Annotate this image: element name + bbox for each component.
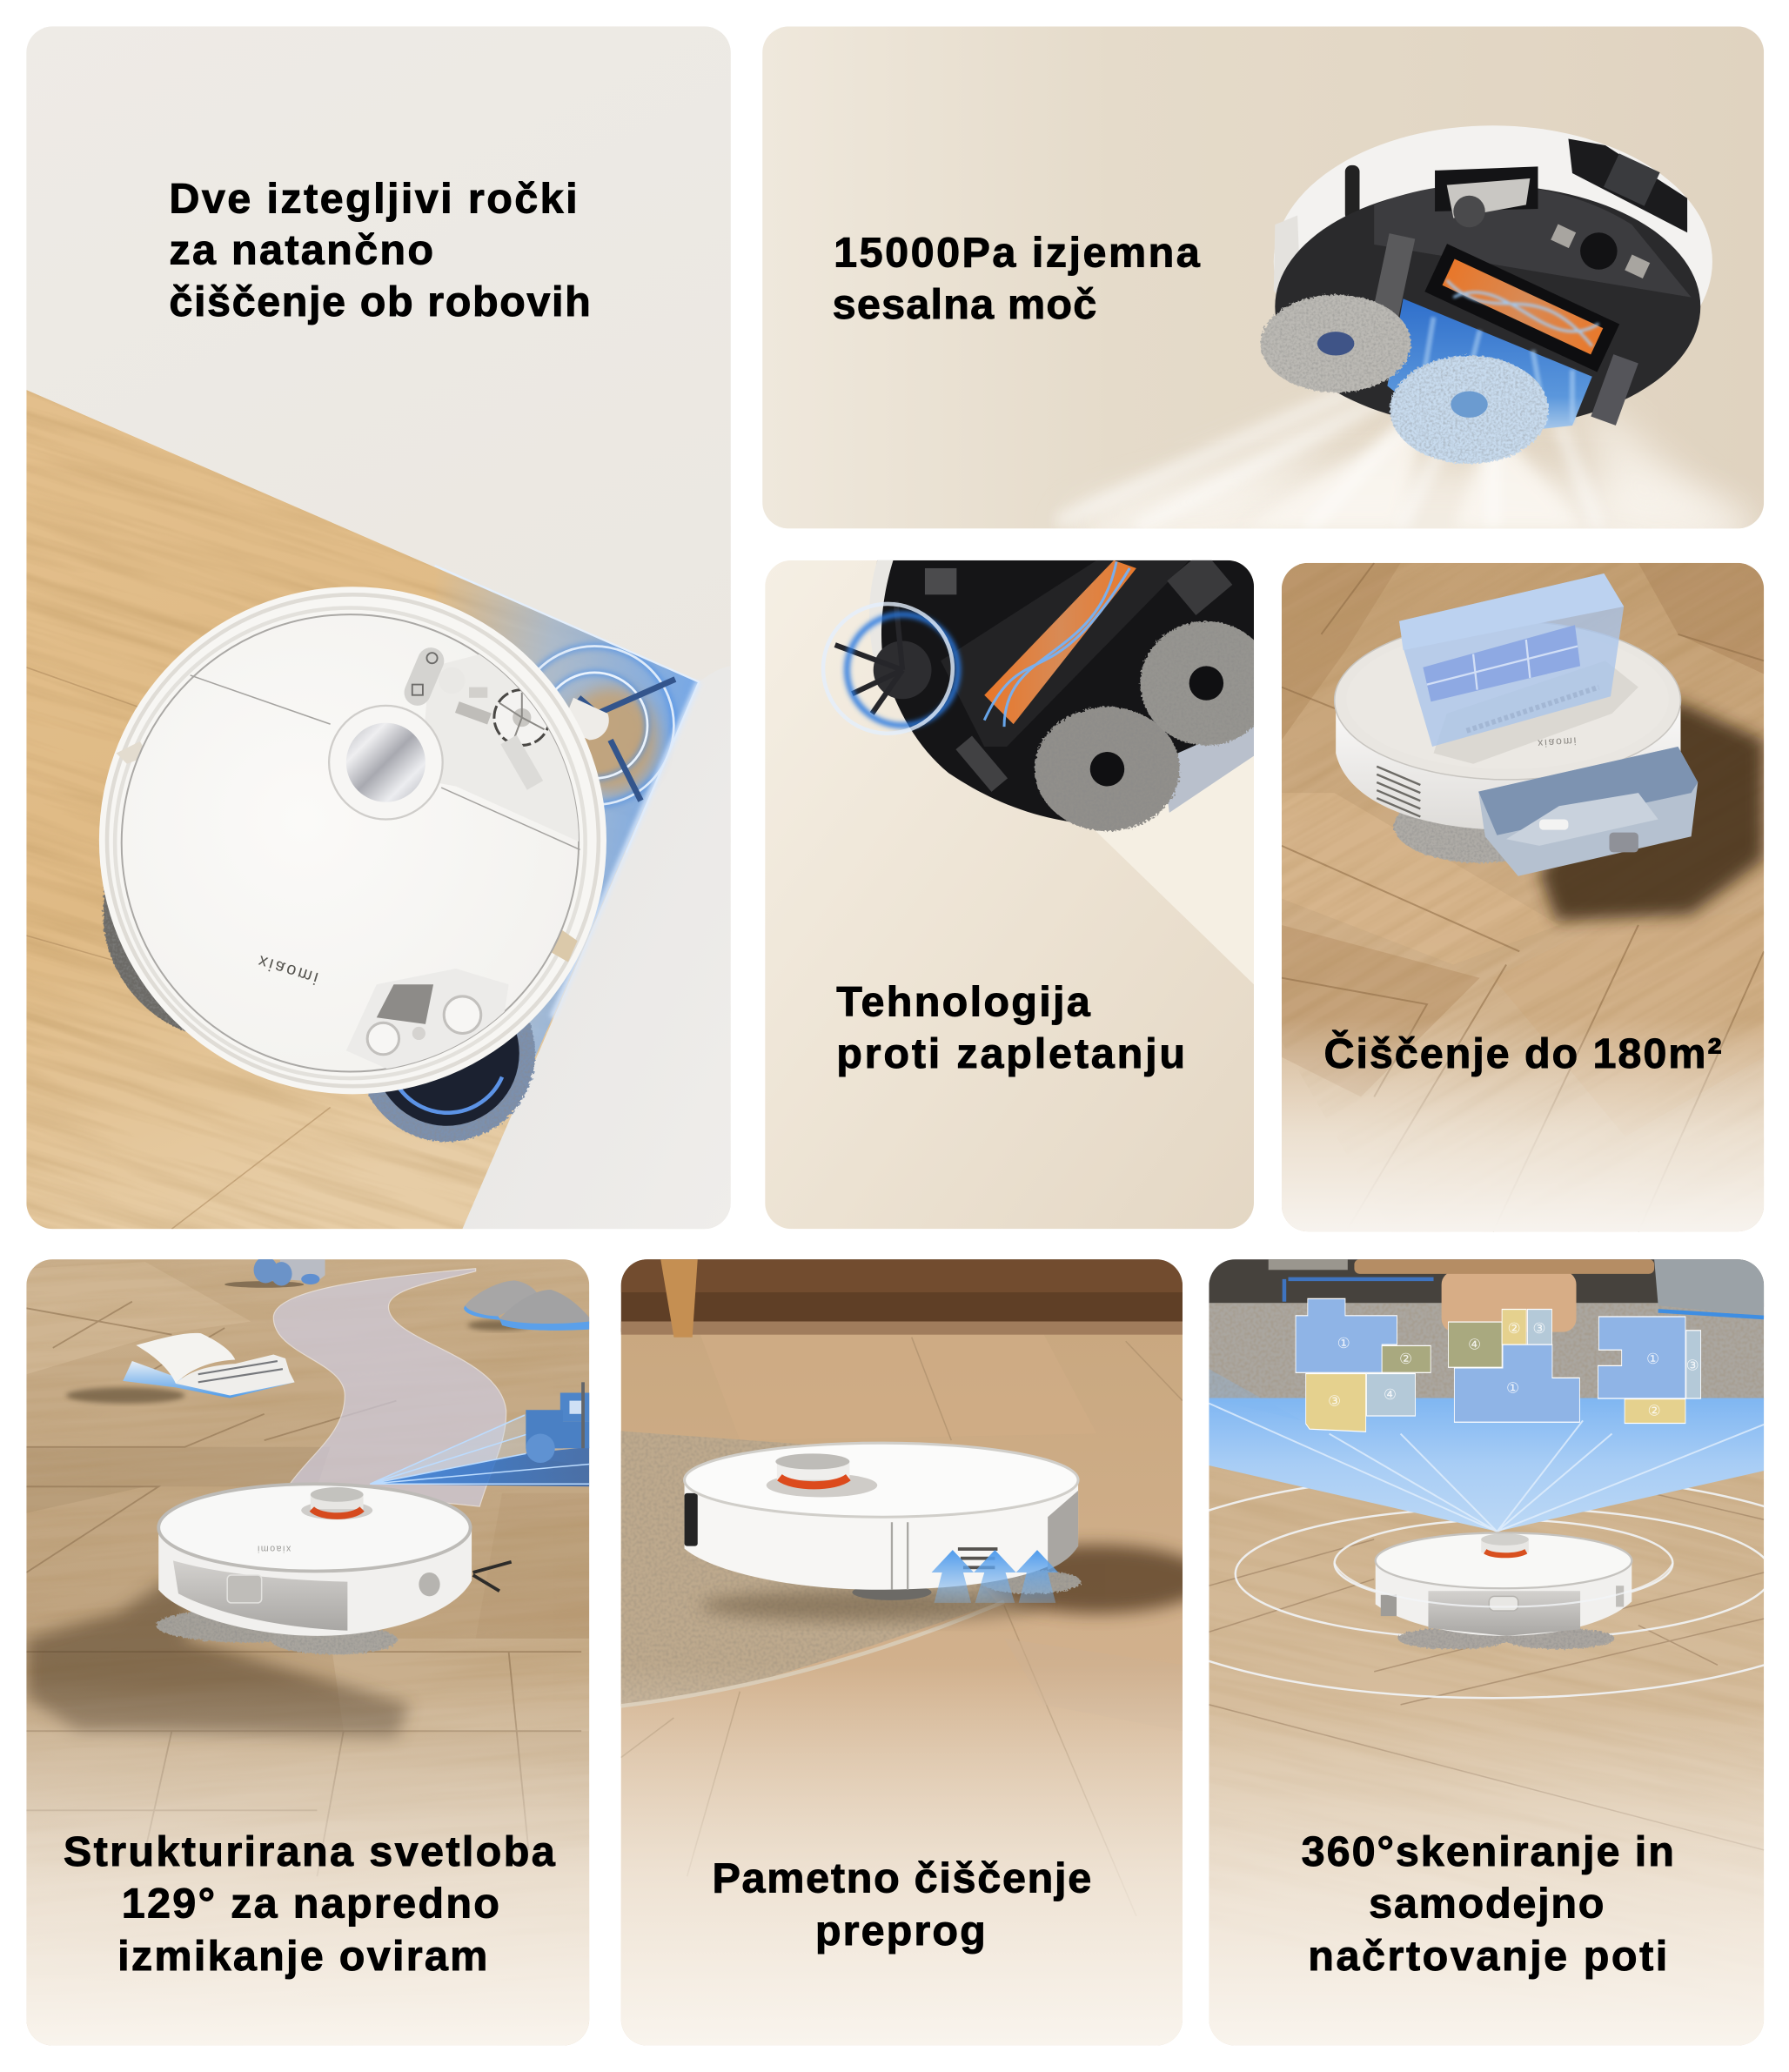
brush bay <box>1424 244 1619 372</box>
heading: samodejno <box>1369 1880 1604 1927</box>
translucent tank <box>173 1560 347 1631</box>
robot <box>1376 1532 1632 1649</box>
left track <box>955 735 1008 792</box>
sofa legs <box>1269 1259 1434 1302</box>
back wall band <box>621 1259 1183 1335</box>
heading: načrtovanje poti <box>1308 1933 1667 1980</box>
tank <box>1428 1591 1580 1636</box>
mop: lit blue <box>368 1023 536 1143</box>
wheel <box>852 1585 932 1600</box>
right wall <box>462 666 731 1229</box>
body side <box>1336 701 1680 830</box>
white shell <box>1274 125 1712 398</box>
vent <box>1377 767 1420 816</box>
map labels: ④ <box>1384 1385 1397 1403</box>
heading <box>712 1854 1091 1955</box>
panel: 360 scanning <box>998 1259 1789 2066</box>
top cover <box>1335 621 1680 780</box>
mop right <box>1390 355 1549 464</box>
mops <box>1398 1628 1509 1649</box>
heading <box>836 979 1185 1077</box>
light beam <box>370 1414 589 1486</box>
map labels: ③ <box>1328 1392 1341 1410</box>
floor <box>621 1328 1183 2046</box>
panel: carpet cleaning <box>621 1259 1209 2046</box>
center sensor disc <box>329 706 443 819</box>
top cover <box>122 614 579 1071</box>
robot with exploded parts <box>1335 573 1698 876</box>
heading: preprog <box>815 1908 986 1955</box>
front ring arc <box>1335 1563 1672 1606</box>
furniture leg <box>660 1259 698 1338</box>
vents <box>1381 1595 1397 1616</box>
side brush <box>473 1562 512 1591</box>
blue sensing glow <box>435 566 699 1057</box>
map labels: ② <box>1399 1350 1412 1367</box>
toy truck <box>526 1382 592 1463</box>
wooden floor <box>26 52 731 1229</box>
heading: čiščenje ob robovih <box>169 278 591 325</box>
curtain <box>1654 1259 1764 1318</box>
book <box>66 1333 295 1404</box>
mop <box>981 1570 1081 1593</box>
panel: suction power <box>762 26 1764 588</box>
gray rear <box>1048 1491 1078 1570</box>
round table <box>1354 1259 1654 1332</box>
brand: xiaomi <box>1538 734 1578 749</box>
panel: 180 m2 cleaning <box>1035 272 1789 1358</box>
panel: structured light <box>0 1204 707 2072</box>
heading: Čiščenje do 180m² <box>1324 1029 1722 1077</box>
back band <box>1209 1259 1764 1307</box>
heading: izmikanje oviram <box>117 1933 487 1980</box>
bumper ring <box>99 587 606 1094</box>
control buttons <box>400 643 448 710</box>
left drive track <box>1373 233 1415 317</box>
internal mechanism lower <box>346 969 509 1073</box>
bottom fade <box>621 1665 1183 2046</box>
herringbone floor <box>0 1204 707 2072</box>
white side strip <box>869 560 893 674</box>
heading: 15000Pa izjemna <box>834 230 1201 277</box>
cleaning path <box>273 1269 506 1506</box>
sensor square <box>925 568 956 594</box>
map labels: ① <box>1646 1350 1659 1367</box>
side window <box>1568 138 1687 232</box>
mop <box>1394 789 1565 863</box>
wood floor <box>998 1341 1789 2066</box>
heading: sesalna moč <box>833 281 1096 328</box>
rug <box>621 1432 1004 1706</box>
top bay <box>1435 166 1538 211</box>
mop: left <box>101 887 186 1032</box>
wall background <box>477 1195 724 1220</box>
lidar <box>1481 1533 1529 1555</box>
map labels: ② <box>1508 1319 1521 1337</box>
map labels: ② <box>1648 1401 1661 1418</box>
map labels: ③ <box>1686 1357 1699 1374</box>
right track <box>1167 550 1232 615</box>
heading: 129° za napredno <box>122 1880 499 1927</box>
dust bin <box>1478 747 1698 876</box>
top cover <box>1376 1532 1632 1588</box>
brush housing <box>941 560 1189 747</box>
slot <box>1345 165 1359 221</box>
background <box>762 26 1764 528</box>
air flow <box>1387 298 1592 439</box>
robot underside <box>1261 125 1712 464</box>
toy car <box>224 1257 325 1288</box>
filter grid <box>1423 625 1580 701</box>
body <box>158 1530 472 1636</box>
map C <box>1598 1317 1701 1424</box>
heading: za natančno <box>169 227 433 274</box>
shadow <box>984 1545 1209 1613</box>
panel: anti-tangle <box>765 550 1272 1229</box>
mop left <box>1261 295 1411 392</box>
corner brush hub <box>874 640 932 699</box>
map labels: ① <box>1506 1378 1519 1396</box>
black underside <box>1275 185 1700 428</box>
orange brush <box>984 560 1136 724</box>
brand: xiaomi <box>256 951 323 989</box>
mop front <box>1035 707 1180 831</box>
map labels <box>1328 1319 1699 1418</box>
shadow <box>1539 701 1764 921</box>
lidar <box>301 1487 372 1519</box>
vent <box>419 1572 440 1596</box>
robot <box>156 1484 512 1654</box>
background <box>765 560 1254 1229</box>
heading: proti zapletanju <box>836 1030 1185 1077</box>
bottom fade <box>1209 1705 1764 2046</box>
heading: Strukturirana svetloba <box>64 1828 556 1875</box>
blue scanning fan <box>1209 1369 1764 1532</box>
internal mechanism upper <box>425 654 579 842</box>
caster and sensors <box>1580 232 1618 270</box>
heading: 360°skeniranje in <box>1302 1828 1674 1875</box>
carpet <box>1209 1303 1764 1401</box>
side brush <box>835 601 902 714</box>
map labels: ④ <box>1468 1335 1481 1352</box>
wood floor <box>1035 272 1789 1358</box>
door seam <box>892 1522 908 1590</box>
blue ring <box>847 614 958 726</box>
right drive track <box>1591 354 1638 426</box>
heading <box>169 175 591 325</box>
scan rings <box>1110 1473 1789 1698</box>
mops <box>156 1608 341 1642</box>
heading <box>833 230 1201 328</box>
shadow at left of robot <box>26 1559 410 1738</box>
map labels: ③ <box>1533 1319 1545 1337</box>
heading <box>1302 1828 1674 1980</box>
heading: Pametno čiščenje <box>712 1854 1091 1901</box>
heading: Dve iztegljivi ročki <box>169 175 578 222</box>
dark side window <box>685 1493 698 1546</box>
heading <box>64 1828 556 1980</box>
panel: extendable arms <box>26 26 731 1229</box>
map labels: ① <box>1337 1334 1350 1351</box>
lift arrows <box>932 1550 1058 1603</box>
heading: Tehnologija <box>836 979 1091 1026</box>
top cover <box>158 1484 471 1571</box>
top cover <box>685 1443 1078 1517</box>
cover seams <box>191 675 580 849</box>
brush ghost <box>1434 660 1638 764</box>
bay patch <box>1163 724 1254 813</box>
robot underside <box>823 550 1272 831</box>
robot <box>685 1443 1081 1600</box>
room maps <box>1296 1298 1701 1432</box>
mop back <box>1140 621 1272 745</box>
water tank <box>1399 573 1624 747</box>
map A <box>1296 1298 1431 1432</box>
slippers <box>464 1280 589 1331</box>
brand: xiaomi <box>256 1544 291 1554</box>
bottom fade <box>1282 1017 1764 1231</box>
air rays <box>1057 383 1758 588</box>
robot top view <box>99 587 606 1094</box>
vent <box>958 1547 997 1569</box>
bottom fade <box>26 1678 589 2046</box>
body <box>685 1483 1078 1590</box>
map B <box>1449 1310 1579 1422</box>
lidar <box>767 1453 877 1497</box>
light wedge <box>1077 560 1254 984</box>
body <box>1376 1560 1632 1636</box>
